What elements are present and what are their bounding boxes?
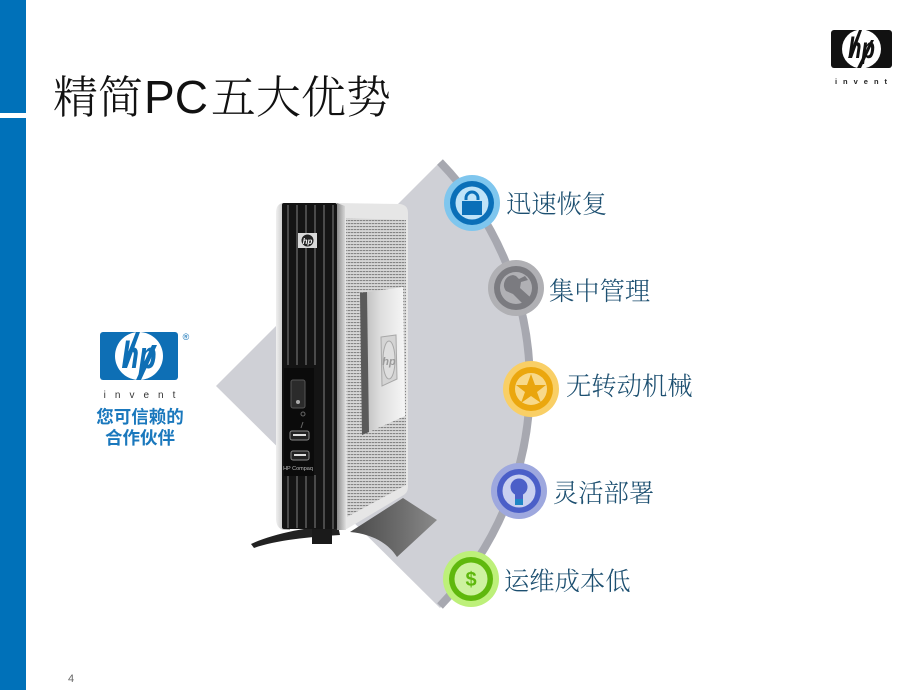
panel: gray fan background [216,162,531,608]
arc: connecting line [440,162,530,606]
control panel [284,368,314,476]
logo: HP blue with caption: ® [183,332,190,342]
label: fast recovery: 迅速恢复 [506,185,607,221]
page number: 4 [68,673,74,685]
device: thin client PC [251,203,437,557]
logo: HP blue with caption [96,332,190,448]
logo: HP blue with caption: 您可信赖的 [96,407,184,427]
sidebar: blue vertical band [0,0,26,690]
silver rim [337,203,346,530]
label: flexible deployment: 灵活部署 [553,474,654,510]
front black face [282,203,337,529]
left silver edge [276,203,290,530]
device: thin client PC: hp [303,237,312,246]
stand left foot [251,526,340,548]
front ribs [288,205,333,529]
icon: star [503,361,559,417]
logo: HP top right: invent [835,77,893,86]
logo: HP top right [831,30,893,86]
title: 精简PC五大优势 [53,61,391,126]
logo: HP top right: hp [848,32,875,65]
label: no moving parts: 无转动机械 [566,367,692,403]
usb ports [290,431,309,440]
label: centralized management: 集中管理 [549,272,650,308]
logo: HP blue with caption: hp [122,335,156,377]
badge hp [298,233,317,248]
label: low operating cost: 运维成本低 [504,562,630,598]
icon: light bulb [491,463,547,519]
side panel body [337,203,408,530]
logo: HP blue with caption: 合作伙伴 [105,428,175,448]
icon: dollar [443,551,499,607]
icon: lock [444,175,500,231]
stand center tab [312,528,332,544]
icon: wrench [488,260,544,316]
logo: HP blue with caption: invent [104,390,184,401]
stand right foot [350,498,437,557]
embossed hp mark [381,335,397,386]
device: thin client PC: hp [382,356,396,368]
side grill [346,218,406,517]
icon: dollar: $ [465,569,477,591]
inset metal panel [360,287,405,435]
brand text: HP Compaq [283,466,313,472]
power button [291,380,305,408]
